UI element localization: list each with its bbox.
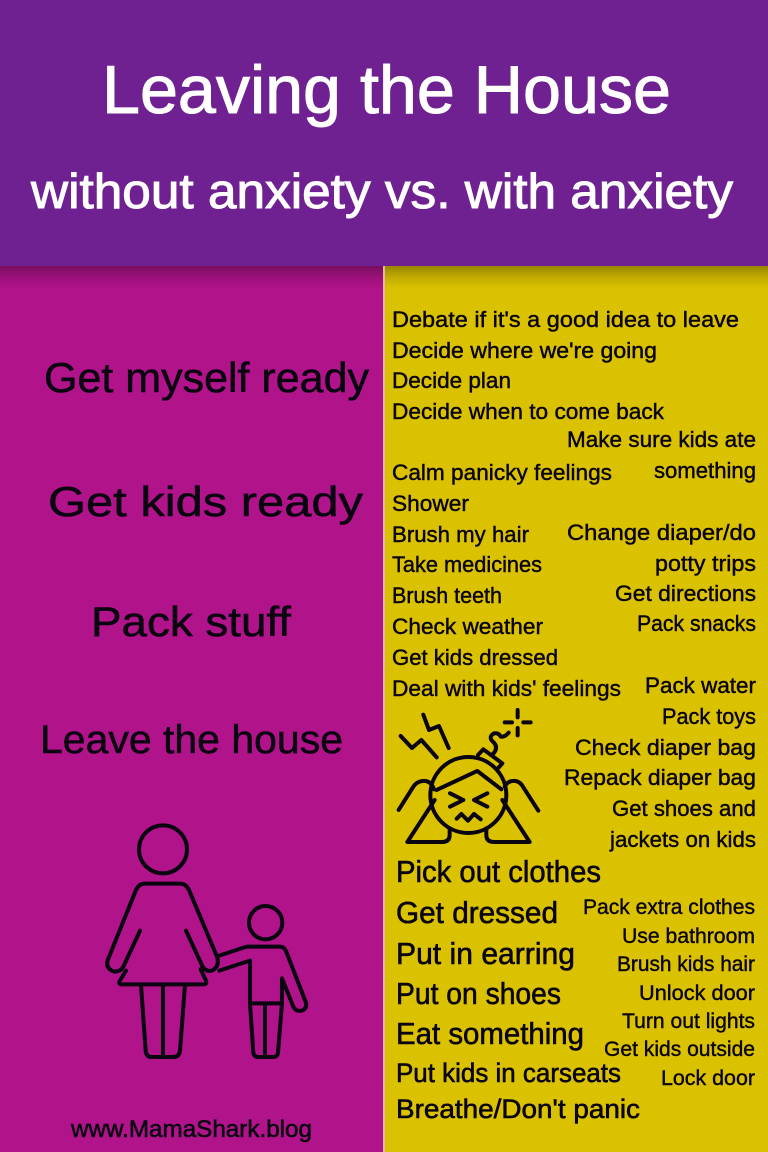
text block: tasks with anxiety, left column: Take medicines (392, 552, 542, 577)
text block: small tasks with anxiety: Get kids outside (604, 1038, 755, 1061)
website credit: www.MamaShark.blog (70, 1116, 312, 1143)
text block: tasks with anxiety, left column: Decide when to come back (392, 399, 665, 424)
text block: tasks with anxiety, right column: potty trips (655, 551, 756, 576)
text block: steps without anxiety: Pack stuff (91, 598, 291, 645)
text block: tasks with anxiety, left column: Decide where we're going (392, 338, 657, 363)
text block: steps without anxiety: Get myself ready (44, 354, 369, 401)
text block: tasks with anxiety, right column: Get shoes and (612, 796, 756, 821)
text block: large tasks with anxiety: Put on shoes (396, 976, 561, 1011)
panel: with anxiety (384, 265, 768, 1152)
text block: tasks with anxiety, right column: jackets on kids (609, 827, 756, 852)
text block: large tasks with anxiety: Eat something (396, 1016, 584, 1051)
text block: tasks with anxiety, left column: Decide plan (392, 368, 511, 393)
text block: tasks with anxiety, right column: Change diaper/do (567, 520, 756, 545)
panel: without anxiety (0, 265, 384, 1152)
text block: tasks with anxiety, left column: Calm panicky feelings (392, 460, 612, 485)
text block: large tasks with anxiety: Breathe/Don't panic (396, 1094, 640, 1124)
text block: large tasks with anxiety: Pick out clothes (396, 854, 601, 889)
text block: small tasks with anxiety: Pack extra clothes (583, 896, 755, 919)
text block: tasks with anxiety, left column: Shower (392, 491, 470, 516)
text block: large tasks with anxiety: Put in earring (396, 936, 575, 971)
text block: large tasks with anxiety: Put kids in carseats (396, 1058, 621, 1088)
text block: tasks with anxiety, right column: Make sure kids ate (567, 427, 756, 452)
icon: mother holding child's hand (107, 825, 306, 1057)
text block: small tasks with anxiety: Unlock door (639, 982, 755, 1005)
text block: small tasks with anxiety (583, 896, 755, 1090)
text block: tasks with anxiety, right column: Pack snacks (637, 611, 756, 636)
text block: tasks with anxiety, right column (564, 427, 757, 852)
text block: steps without anxiety: Get kids ready (48, 478, 363, 525)
text block: tasks with anxiety, left column: Debate if it's a good idea to leave (392, 307, 739, 332)
text block: tasks with anxiety, left column: Brush teeth (392, 583, 502, 608)
text block: small tasks with anxiety: Brush kids hair (617, 953, 755, 976)
title (30, 52, 734, 219)
text block: tasks with anxiety, right column: something (654, 458, 756, 483)
text block: steps without anxiety (40, 354, 369, 762)
header band (0, 0, 768, 266)
text block: tasks with anxiety, left column: Get kids dressed (392, 645, 558, 670)
heading: subtitle: without anxiety vs. with anxiety (30, 165, 734, 219)
text block: steps without anxiety: Leave the house (40, 718, 343, 762)
header shadow (0, 265, 768, 289)
text block: tasks with anxiety, right column: Get directions (615, 581, 756, 606)
text block: large tasks with anxiety (396, 854, 640, 1124)
text block: tasks with anxiety, left column: Brush my hair (392, 522, 529, 547)
icon: stressed girl with bomb (399, 710, 538, 842)
text block: small tasks with anxiety: Lock door (661, 1067, 755, 1090)
text block: tasks with anxiety, right column: Pack toys (662, 704, 756, 729)
text block: tasks with anxiety, right column: Pack water (645, 673, 757, 698)
text block: large tasks with anxiety: Get dressed (396, 895, 558, 930)
text block: tasks with anxiety, left column: Check weather (392, 614, 544, 639)
text block: tasks with anxiety, right column: Check diaper bag (575, 735, 756, 760)
text block: small tasks with anxiety: Use bathroom (622, 925, 755, 948)
text block: small tasks with anxiety: Turn out lights (622, 1010, 755, 1033)
heading: main title: Leaving the House (102, 52, 671, 128)
panel divider (383, 265, 385, 1152)
text block: tasks with anxiety, right column: Repack diaper bag (564, 765, 756, 790)
text block: tasks with anxiety, left column: Deal with kids' feelings (392, 676, 621, 701)
text block: tasks with anxiety, left column (392, 307, 739, 701)
